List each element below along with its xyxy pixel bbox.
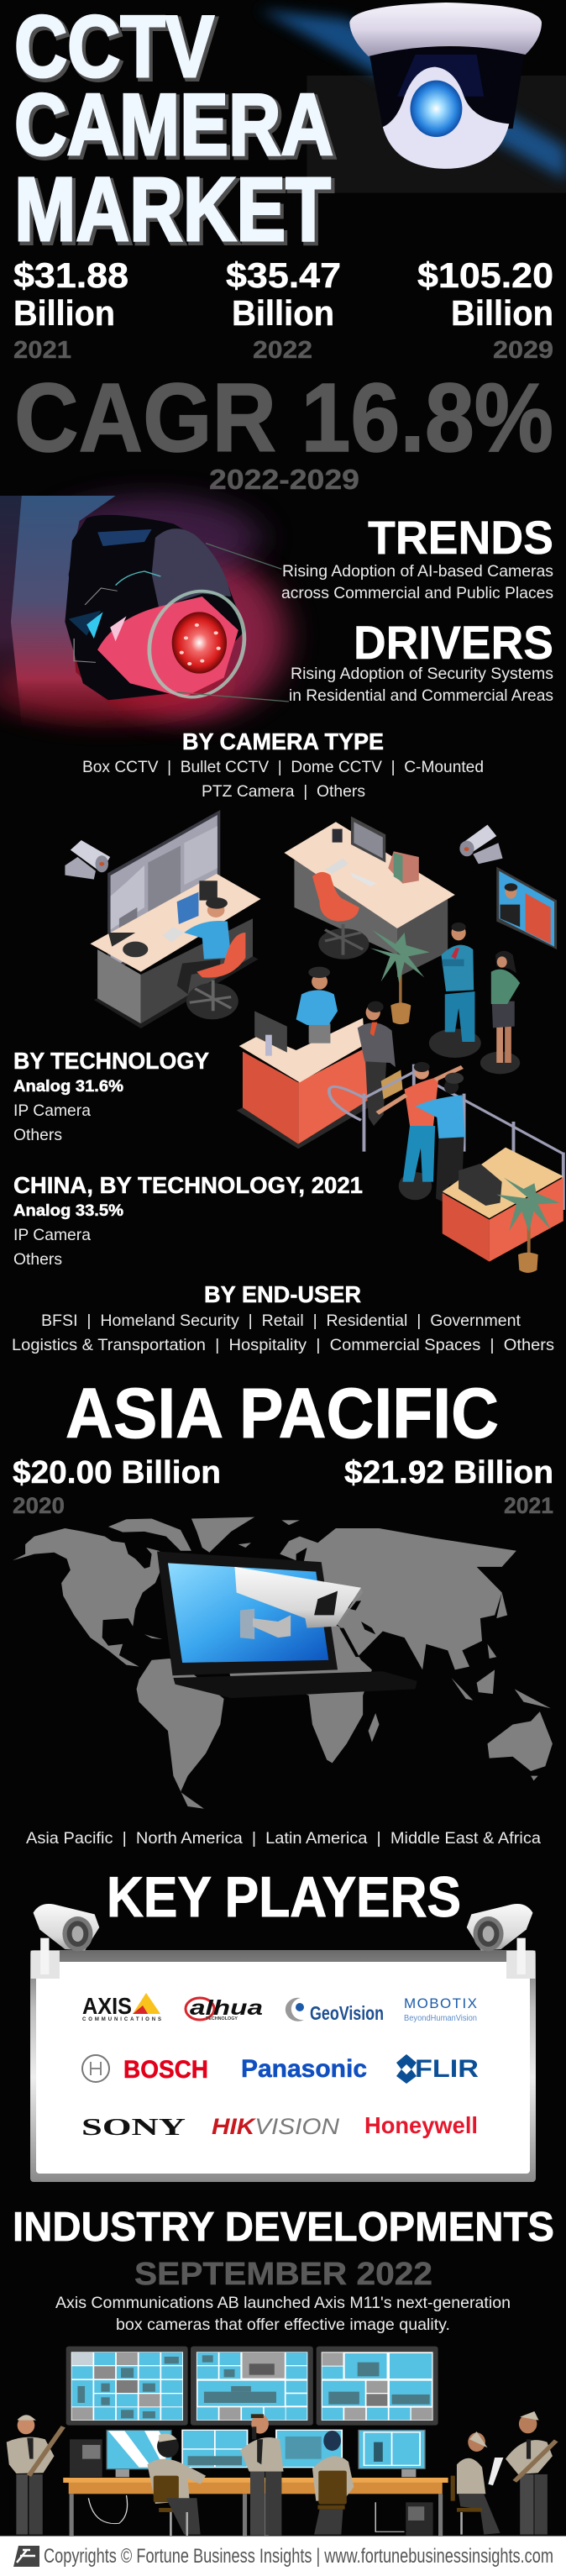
seated guard right [312, 2431, 354, 2535]
industry developments: INDUSTRY DEVELOPMENTS [13, 2205, 554, 2250]
security camera [235, 1567, 363, 1639]
title: MARKET [14, 158, 331, 260]
barrier [329, 1065, 563, 1210]
desk [63, 2478, 448, 2536]
asia pacific heading: 2021 [504, 1493, 553, 1518]
desk right [284, 817, 455, 977]
honeywell logo: Honeywell [364, 2112, 478, 2138]
illustration: control room [7, 2347, 556, 2536]
chair right [312, 872, 369, 959]
footer [0, 2536, 566, 2576]
laptop [157, 1552, 417, 1698]
by end-user [12, 1281, 554, 1354]
by technology: Analog 31.6% [13, 1077, 123, 1096]
image: red AI camera [0, 496, 289, 731]
tv screen [496, 867, 557, 949]
trends: across Commercial and Public Places [281, 584, 553, 602]
by camera type: PTZ Camera | Others [202, 782, 365, 801]
china by technology: CHINA, BY TECHNOLOGY, 2021 [13, 1172, 363, 1198]
video wall right [317, 2347, 438, 2426]
operator [177, 897, 231, 994]
stat: 2022: 2022 [253, 337, 312, 364]
drivers: Rising Adoption of Security Systems [291, 665, 553, 683]
drivers: in Residential and Commercial Areas [289, 686, 553, 705]
by camera type: Box CCTV | Bullet CCTV | Dome CCTV | C-Mounted [82, 758, 484, 776]
axis logo [82, 1993, 161, 2022]
palm plant [370, 930, 430, 1024]
desk monitors [107, 2430, 425, 2477]
stat: 2021: Billion [13, 293, 115, 333]
world map [13, 1517, 553, 1809]
by end-user: BY END-USER [204, 1281, 361, 1307]
clipboard guard seated [451, 2431, 503, 2535]
standing man [429, 923, 481, 1058]
industry developments [13, 2205, 554, 2334]
china by technology [13, 1172, 363, 1269]
title: CCTV [17, 1, 217, 98]
man on phone [358, 1001, 402, 1126]
by technology: Others [13, 1126, 62, 1144]
image: dome camera [260, 3, 566, 193]
standing guard with radio [240, 2414, 284, 2536]
hikvision logo: HIKVISION [212, 2114, 340, 2139]
screening guard [415, 1073, 465, 1201]
industry developments: Axis Communications AB launched Axis M11's next-generation [55, 2294, 511, 2312]
camera: left panel mount [31, 1904, 99, 1979]
axis logo: AXIS [82, 1993, 132, 2019]
regions list: Asia Pacific | North America | Latin America | Middle East & Africa [26, 1829, 541, 1848]
PC towers [70, 2439, 433, 2536]
key players panel [30, 1950, 536, 2182]
by technology: IP Camera [13, 1101, 91, 1120]
by end-user: Logistics & Transportation | Hospitality | Commercial Spaces | Others [12, 1336, 554, 1354]
screened man [377, 1062, 462, 1200]
stat: 2029: Billion [451, 293, 553, 333]
by end-user: BFSI | Homeland Security | Retail | Residential | Government [41, 1312, 521, 1330]
by camera type [82, 728, 484, 801]
footer logo [13, 2546, 39, 2567]
asia pacific heading: $21.92 Billion [344, 1455, 553, 1490]
dahua logo: TECHNOLOGY [206, 2016, 238, 2021]
trends: Rising Adoption of AI-based Cameras [282, 562, 553, 581]
dahua logo [186, 1996, 263, 2021]
industry developments: box cameras that offer effective image quality. [116, 2316, 450, 2334]
flir logo [396, 2054, 479, 2084]
stat: 2021: $31.88 [13, 255, 128, 295]
by technology [13, 1048, 209, 1144]
industry developments: SEPTEMBER 2022 [134, 2257, 432, 2292]
standing woman [480, 951, 520, 1074]
china by technology: IP Camera [13, 1226, 91, 1244]
right guard with rifle [506, 2411, 556, 2535]
flir logo: FLIR [415, 2055, 479, 2083]
luggage table [443, 1148, 563, 1262]
axis logo: COMMUNICATIONS [82, 2017, 161, 2022]
china by technology: Others [13, 1250, 62, 1269]
sony logo: SONY [81, 2114, 186, 2141]
drivers [289, 616, 553, 705]
title [14, 0, 336, 262]
mobotix logo: MOBOTIX [404, 1995, 477, 2011]
geovision logo: GeoVision [310, 2002, 384, 2024]
panasonic logo: Panasonic [241, 2055, 367, 2083]
by camera type: BY CAMERA TYPE [182, 728, 384, 754]
trends [281, 511, 553, 602]
china by technology: Analog 33.5% [13, 1201, 123, 1220]
palm plant 2 [496, 1178, 559, 1273]
video wall middle [191, 2347, 313, 2426]
illustration: security office [65, 810, 557, 1028]
asia pacific heading: $20.00 Billion [13, 1455, 221, 1490]
title: CAMERA [17, 79, 336, 176]
stat: 2021: 2021 [13, 337, 71, 364]
guard at desk [296, 967, 338, 1044]
mobotix logo: BeyondHumanVision [404, 2014, 477, 2023]
stat: 2029 [417, 255, 553, 364]
stat: 2029: 2029 [493, 337, 553, 364]
stat: 2029: $105.20 [417, 255, 553, 295]
desk left [91, 874, 260, 1028]
stat: 2022: $35.47 [226, 255, 341, 295]
asia pacific heading [13, 1374, 553, 1518]
wall camera left [65, 840, 110, 880]
left guard with rifle [7, 2415, 63, 2535]
title: CAMERA [14, 76, 333, 174]
asia pacific heading: ASIA PACIFIC [66, 1374, 499, 1453]
CAGR: 2022-2029 [209, 464, 359, 495]
stat: 2022: Billion [232, 293, 334, 333]
video wall left [66, 2347, 188, 2426]
stat: 2021 [13, 255, 128, 364]
geovision logo [286, 1998, 384, 2024]
camera: right panel mount [467, 1904, 535, 1979]
drivers: DRIVERS [354, 616, 553, 669]
bosch logo [82, 2055, 208, 2084]
trends: TRENDS [368, 511, 553, 564]
chair left [186, 933, 245, 1019]
mobotix logo [404, 1995, 477, 2023]
title: CCTV [14, 0, 214, 96]
reception desk [237, 1011, 375, 1149]
dahua logo: alhua [190, 1996, 263, 2020]
video wall [107, 810, 220, 975]
key players heading: KEY PLAYERS [107, 1865, 461, 1929]
wall camera right [459, 825, 503, 864]
bosch logo: BOSCH [123, 2056, 208, 2084]
by technology: BY TECHNOLOGY [13, 1048, 209, 1074]
asia pacific heading: 2020 [13, 1493, 65, 1518]
stat: 2022 [226, 255, 341, 364]
title: MARKET [17, 160, 333, 262]
seated guard left [147, 2434, 206, 2536]
